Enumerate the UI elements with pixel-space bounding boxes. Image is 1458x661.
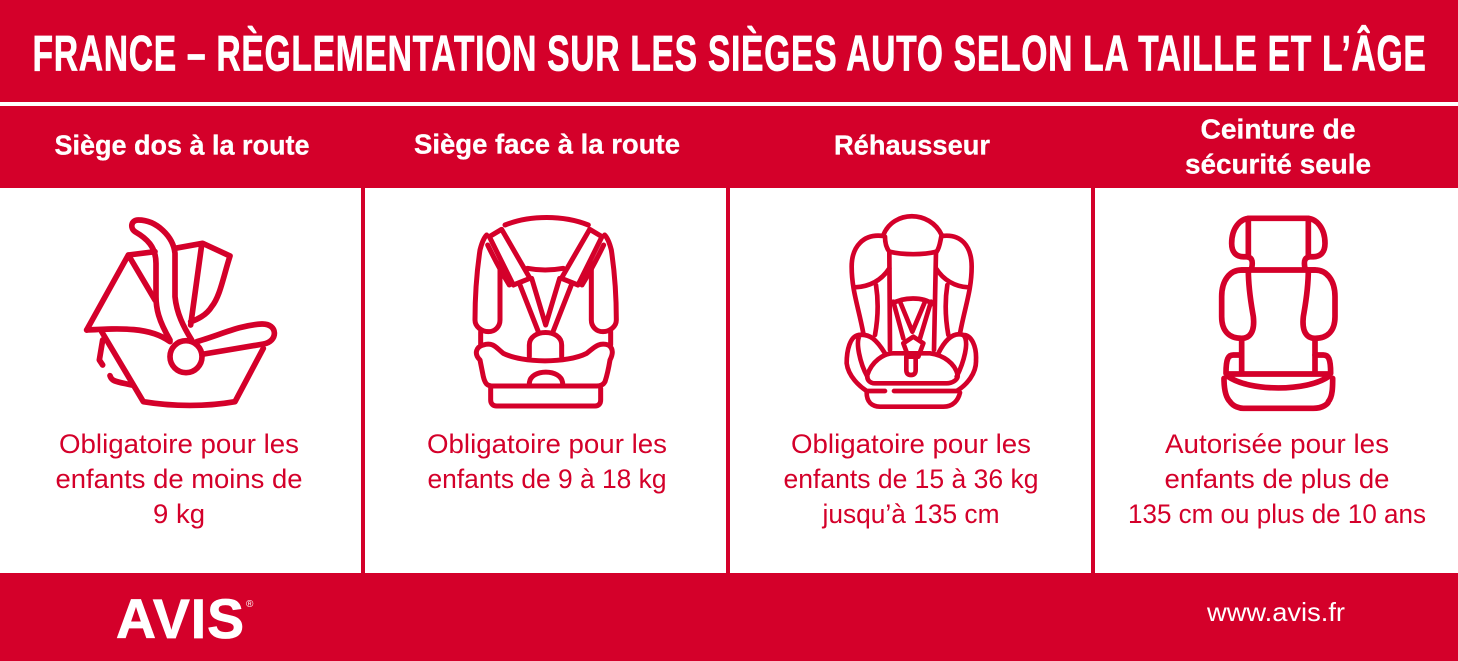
text: seat belt requirement: enfants de plus de — [1164, 464, 1390, 494]
heading: forward-facing seat: Siège face à la route — [414, 128, 680, 160]
title banner — [0, 0, 1458, 102]
text: seat belt requirement: 135 cm ou plus de 10 ans — [1128, 499, 1426, 529]
text: seat belt requirement — [1128, 429, 1426, 529]
text: booster requirement — [784, 429, 1038, 529]
icon: backless-style seat — [1222, 218, 1335, 408]
column header band — [0, 106, 1458, 188]
logo: AVIS: AVIS — [116, 587, 245, 650]
text: forward-facing requirement: Obligatoire pour les — [427, 429, 667, 459]
icon: infant carrier — [87, 220, 274, 405]
text: rear-facing requirement: 9 kg — [153, 499, 205, 529]
text: seat belt requirement: Autorisée pour les — [1165, 429, 1389, 459]
text: booster requirement: enfants de 15 à 36 kg — [784, 464, 1038, 494]
website url: www.avis.fr — [1206, 597, 1345, 627]
text: rear-facing requirement: enfants de moins de — [56, 464, 302, 494]
icon: booster seat with harness — [847, 216, 976, 407]
heading: seat belt only: Ceinture de — [1200, 114, 1356, 144]
logo: AVIS: ® — [246, 599, 254, 610]
footer band — [0, 573, 1458, 661]
text: forward-facing requirement: enfants de 9 à 18 kg — [428, 464, 666, 494]
text: booster requirement: Obligatoire pour les — [791, 429, 1031, 459]
text: rear-facing requirement: Obligatoire pour les — [59, 429, 299, 459]
icon: forward-facing child seat — [475, 217, 616, 406]
text: booster requirement: jusqu’à 135 cm — [822, 499, 1000, 529]
text: forward-facing requirement — [427, 429, 667, 494]
text: rear-facing requirement — [56, 429, 302, 529]
heading: booster: Réhausseur — [834, 130, 990, 160]
heading: seat belt only: sécurité seule — [1185, 148, 1371, 180]
heading: rear-facing seat: Siège dos à la route — [54, 130, 310, 160]
heading: seat belt only — [1185, 114, 1371, 180]
